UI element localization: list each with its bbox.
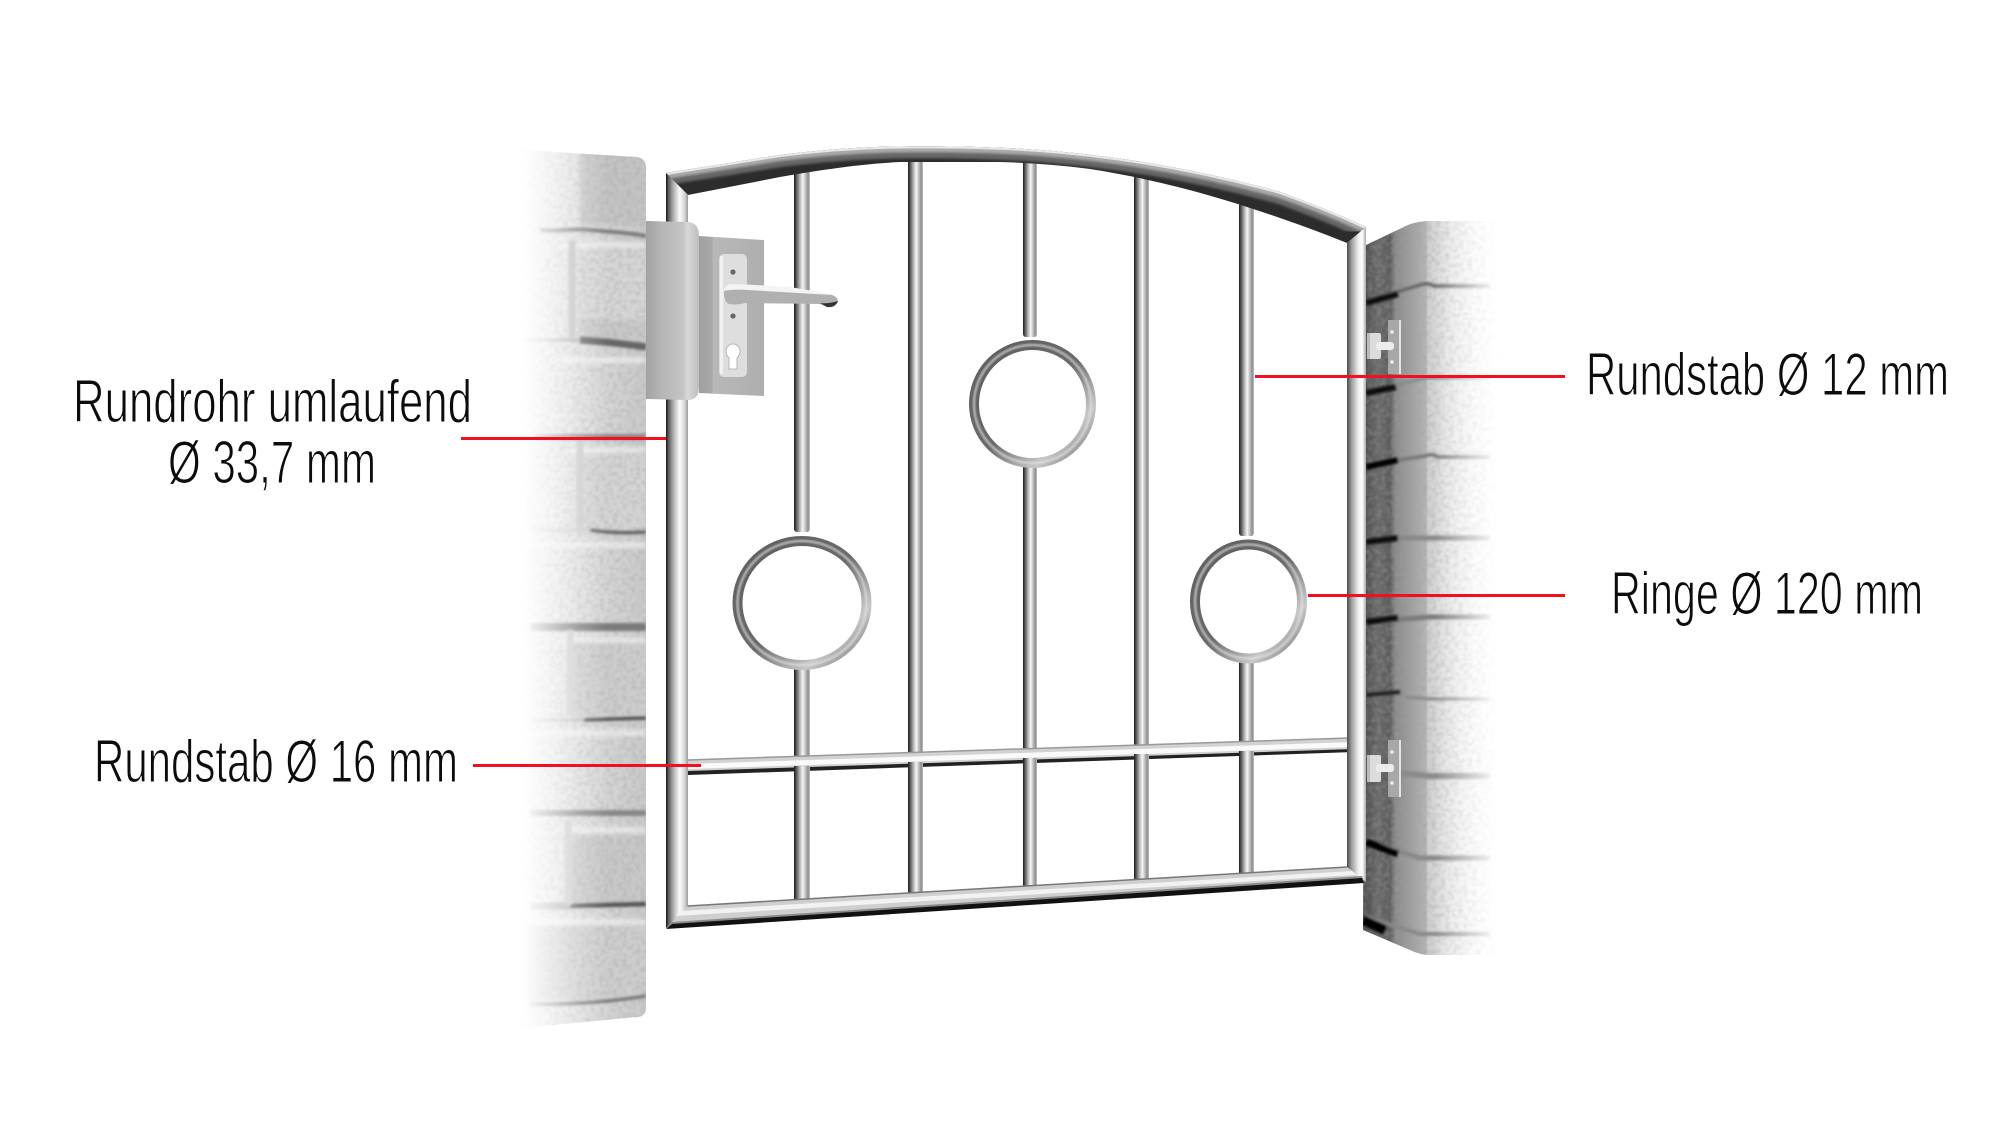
label: Rundstab 16 mm: Rundstab Ø 16 mm <box>94 728 458 795</box>
frame: bottom rail <box>666 867 1364 929</box>
frame: right tube <box>1347 227 1366 882</box>
frame: left tube <box>666 173 688 928</box>
label: Rundrohr umlaufend <box>73 368 472 496</box>
ring centre <box>974 345 1091 463</box>
ring right <box>1195 544 1302 658</box>
lock face plate with keyhole <box>719 254 747 377</box>
frame: arched top rail <box>666 146 1366 243</box>
left brick pillar <box>530 151 646 1027</box>
hinge: lower <box>1367 740 1401 797</box>
lock rosette <box>646 221 699 400</box>
door handle <box>723 284 838 307</box>
leader: Ringe <box>1308 594 1565 597</box>
leader: Rundstab 16 mm <box>473 764 701 767</box>
right brick pillar <box>1363 221 1490 955</box>
leader: Rundrohr <box>461 437 666 440</box>
label: Rundrohr umlaufend: Rundrohr umlaufend <box>73 368 472 435</box>
horizontal bar <box>688 738 1354 775</box>
label: Rundrohr umlaufend: Ø 33,7 mm <box>168 429 376 496</box>
leader: Rundstab 12 mm <box>1255 375 1565 378</box>
vertical bars <box>794 158 1254 902</box>
ring left <box>738 541 866 665</box>
lock back plate <box>699 236 764 396</box>
hinge: upper <box>1367 320 1401 374</box>
gate diagram <box>77 146 1946 1027</box>
